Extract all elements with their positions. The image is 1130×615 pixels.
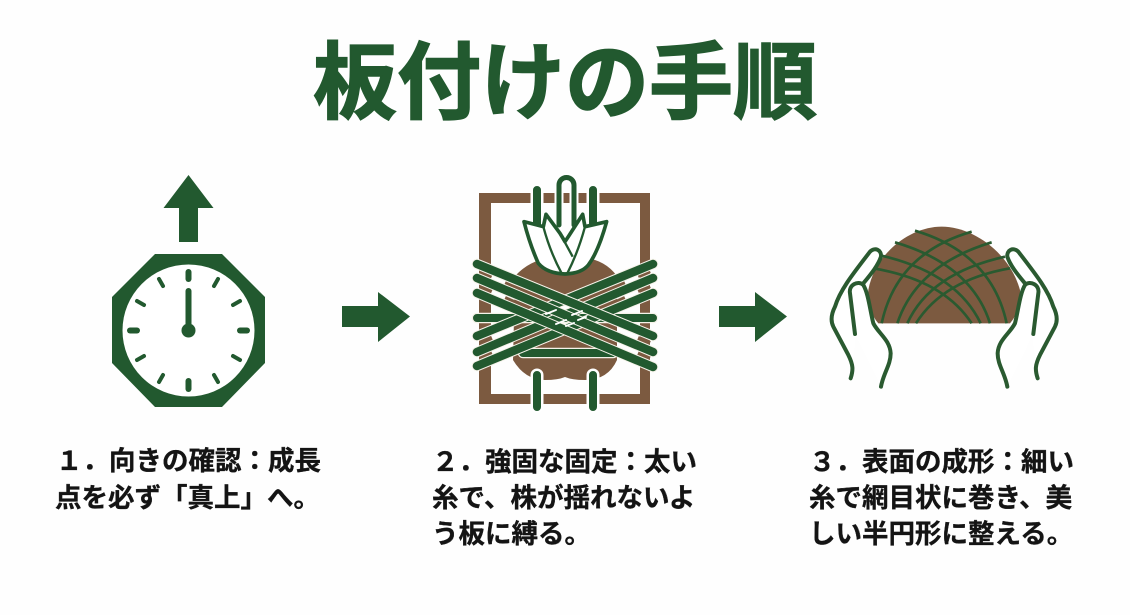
leaves bbox=[524, 214, 607, 274]
icon: plant tied to board bbox=[477, 178, 653, 407]
root ball bbox=[513, 258, 617, 380]
text block: step 2: 糸で、株が揺れないよ bbox=[432, 483, 695, 513]
text block: step 2: う板に縛る。 bbox=[432, 519, 591, 549]
white crossing gap bbox=[537, 303, 593, 332]
left hand bbox=[832, 249, 891, 387]
text block: step 2: ２．強固な固定：太い bbox=[432, 447, 697, 477]
text block: step 3 bbox=[809, 447, 1074, 549]
text block: step 2 bbox=[432, 447, 697, 549]
icon: clock bbox=[112, 254, 265, 407]
text block: step 1 bbox=[55, 446, 321, 513]
icon: up arrow bbox=[164, 175, 214, 242]
icon: hands shaping a netted dome bbox=[832, 227, 1057, 387]
board frame bbox=[479, 193, 650, 404]
net threads bbox=[873, 231, 1010, 323]
dome bbox=[868, 227, 1020, 323]
text block: step 3: しい半円形に整える。 bbox=[809, 519, 1073, 549]
lower ties bbox=[537, 375, 593, 407]
binding strands bbox=[477, 264, 653, 367]
weave gaps at centre bbox=[546, 310, 586, 326]
right hand bbox=[998, 249, 1057, 387]
ties above the leaves bbox=[537, 178, 593, 225]
text block: step 1: １．向きの確認：成長 bbox=[56, 446, 321, 476]
arrow: step 2 to step 3 bbox=[719, 292, 787, 342]
title: 板付けの手順 bbox=[313, 36, 817, 130]
brown strips between strands bbox=[480, 271, 650, 358]
text block: step 3: ３．表面の成形：細い bbox=[809, 447, 1074, 477]
arrow: step 1 to step 2 bbox=[342, 292, 410, 342]
text block: step 3: 糸で網目状に巻き、美 bbox=[809, 483, 1072, 513]
text block: step 1: 点を必ず「真上」へ。 bbox=[55, 483, 320, 513]
